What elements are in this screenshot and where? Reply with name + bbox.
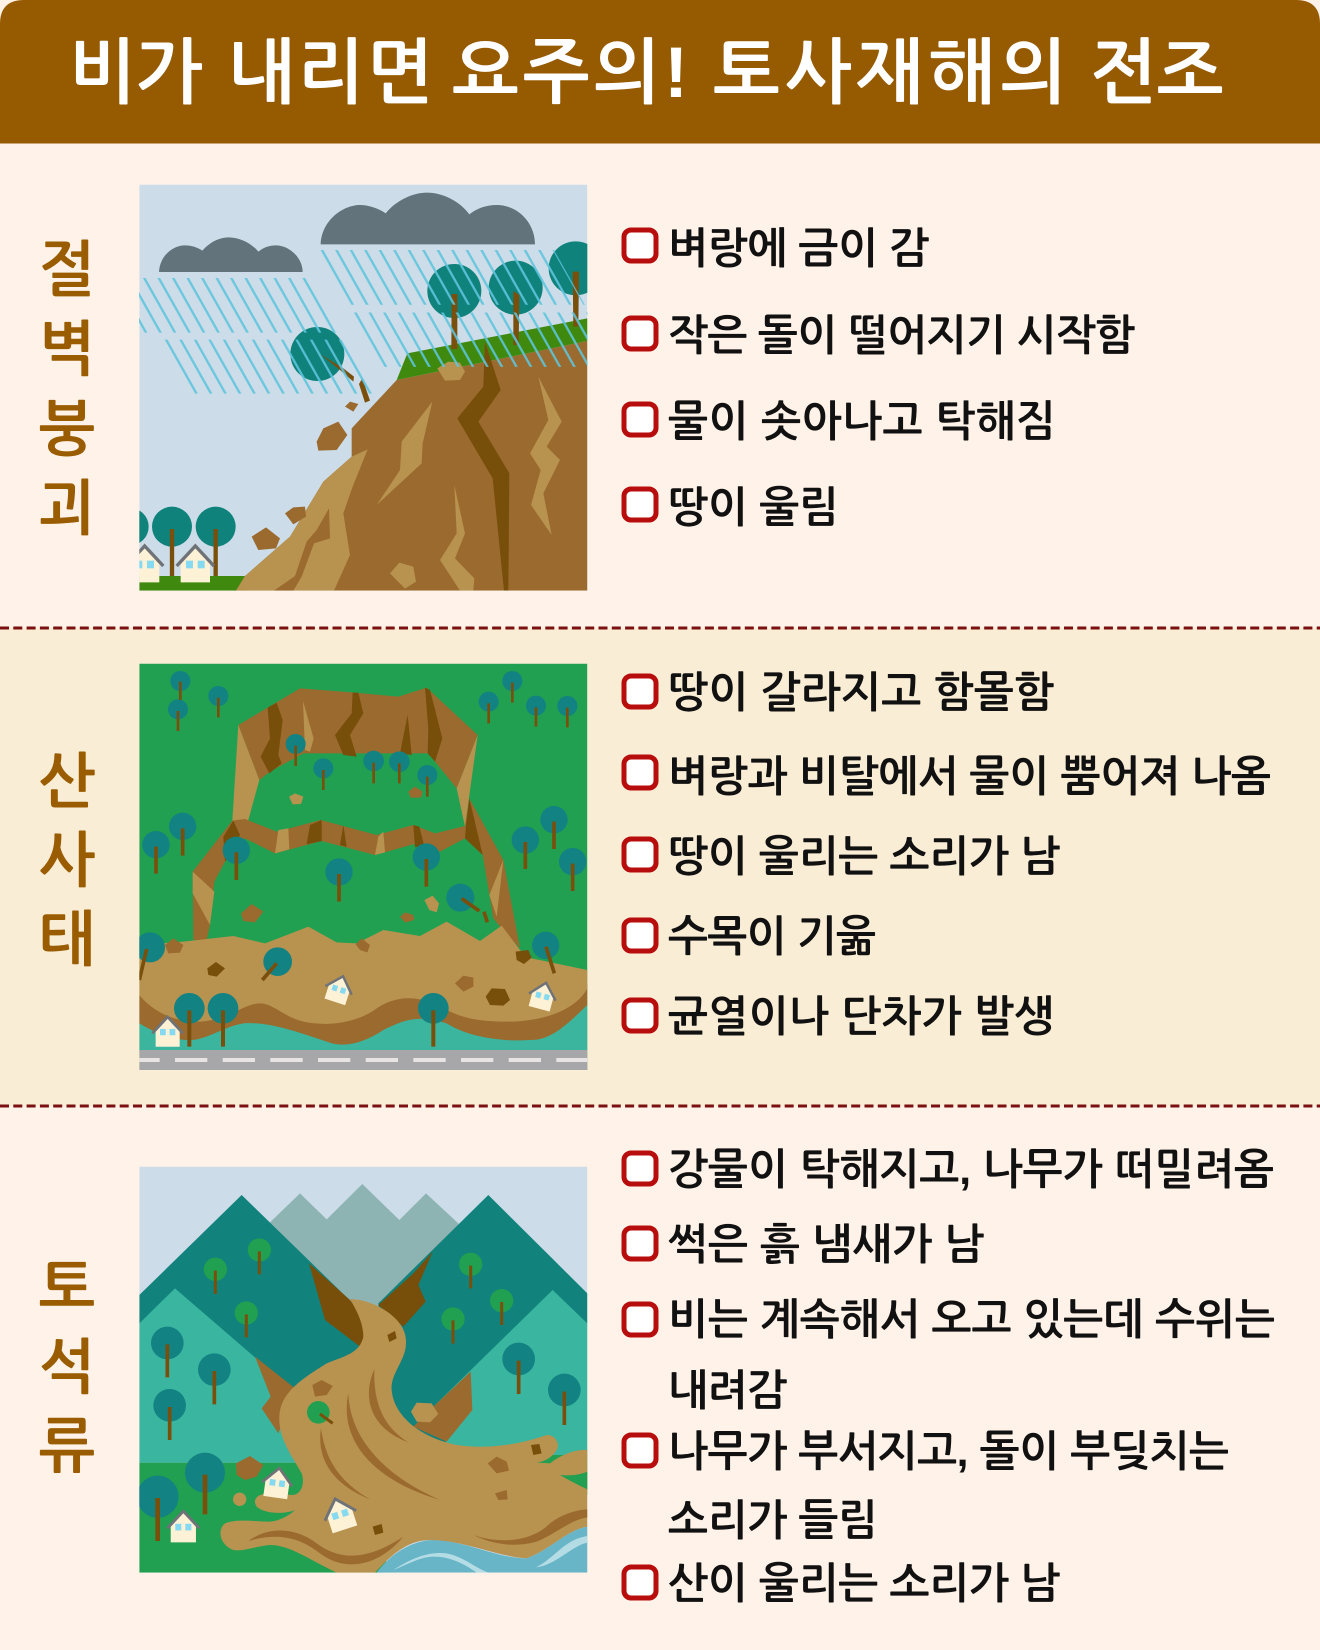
checklist: landslide [624,670,1271,1041]
panel: landslide [39,664,1271,1070]
title: 내리면 [228,34,436,113]
heading: 산사태: 태 [39,906,95,973]
panel: debris flow [39,1147,1275,1608]
checklist: landslide: 땅이 울리는 소리가 남 [668,834,1060,881]
checklist: debris flow: 산이 울리는 소리가 남 [668,1561,1060,1608]
heading: 절벽붕괴: 벽 [39,316,95,383]
checklist: landslide: 균열이나 단차가 발생 [668,994,1054,1041]
illustration: landslide on forested slope [139,664,588,1070]
title: 비가 [69,34,203,113]
checklist: landslide: 땅이 갈라지고 함몰함 [668,670,1054,717]
heading: 산사태: 산 [39,748,95,815]
checklist: cliff collapse [624,226,1135,532]
checklist: debris flow: 강물이 탁해지고, 나무가 떠밀려옴 [668,1147,1274,1194]
panel: cliff collapse [39,185,1135,591]
checklist: landslide: 벼랑과 비탈에서 물이 뿜어져 나옴 [668,754,1271,801]
checklist: debris flow: 나무가 부서지고, 돌이 부딪치는 [668,1429,1229,1476]
header banner [0,0,1320,144]
heading: 토석류: 토 [39,1255,95,1322]
checklist: cliff collapse: 땅이 울림 [668,485,839,532]
checklist: cliff collapse: 물이 솟아나고 탁해짐 [668,399,1056,446]
heading: 토석류: 류 [39,1413,95,1480]
heading: 산사태: 사 [39,827,96,894]
title: 요주의! [452,34,692,113]
checklist: cliff collapse: 작은 돌이 떨어지기 시작함 [668,313,1135,360]
heading: 토석류: 석 [39,1334,95,1401]
heading: 절벽붕괴: 붕 [39,396,95,463]
title: 전조 [1090,34,1223,113]
heading: 토석류 [39,1255,95,1480]
heading: 절벽붕괴: 절 [39,236,95,303]
heading: 절벽붕괴: 괴 [39,475,95,542]
checklist: debris flow: 썩은 흙 냄새가 남 [668,1222,984,1269]
checklist: debris flow: 비는 계속해서 오고 있는데 수위는 [668,1297,1275,1344]
heading: 산사태 [39,748,96,973]
checklist: debris flow: 소리가 들림 [668,1498,878,1545]
checklist: cliff collapse: 벼랑에 금이 감 [668,226,929,273]
illustration: debris flow through mountains [139,1166,588,1573]
illustration: cliff collapse in rain [139,184,588,591]
checklist: debris flow: 내려감 [668,1368,787,1415]
panel: 산사태 band background [0,628,1320,1106]
heading: 절벽붕괴 [39,236,95,542]
checklist: landslide: 수목이 기욺 [668,914,876,961]
title: 토사재해의 [713,34,1072,113]
checklist: debris flow [624,1147,1275,1608]
